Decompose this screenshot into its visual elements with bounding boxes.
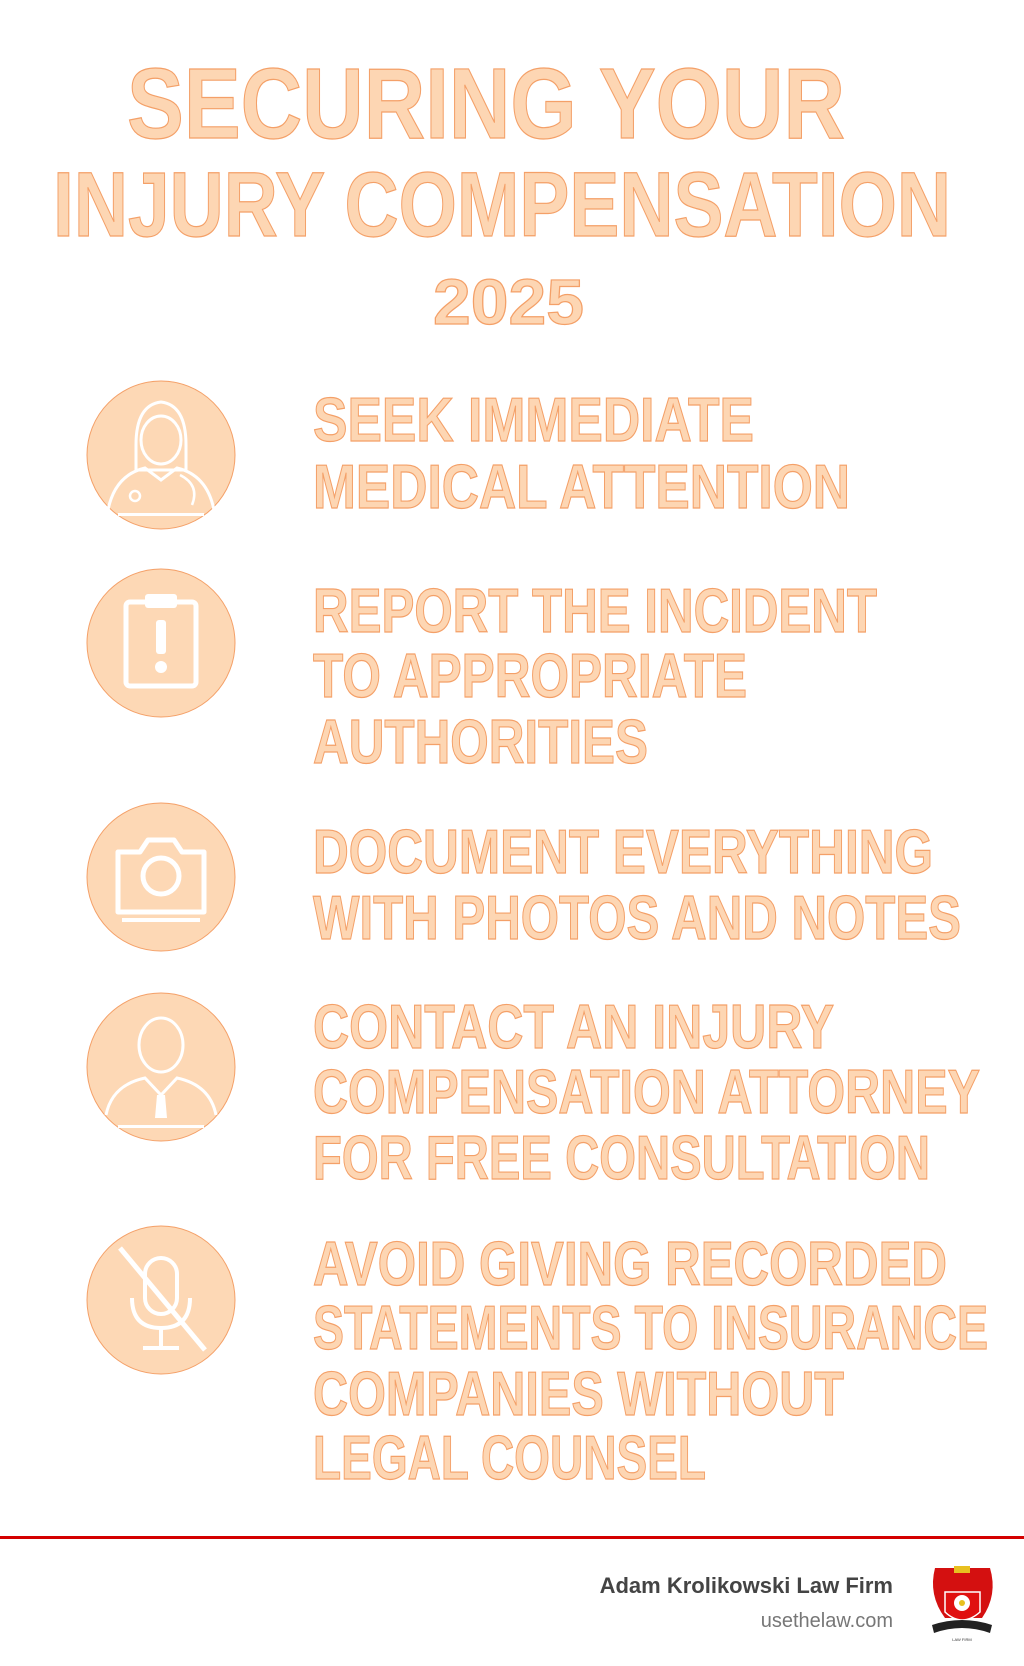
title: SECURING YOUR: [127, 48, 845, 160]
step text: COMPANIES WITHOUT: [313, 1360, 844, 1429]
step text: [313, 818, 961, 953]
step text: [313, 993, 980, 1193]
step text: REPORT THE INCIDENT: [313, 577, 877, 646]
step text: MEDICAL ATTENTION: [313, 453, 850, 522]
step 4: contact attorney: [87, 993, 980, 1193]
step text: TO APPROPRIATE: [313, 642, 747, 711]
step 1: seek medical attention: [87, 381, 850, 529]
footer: Adam Krolikowski Law Firm: [600, 1573, 893, 1598]
step 3: document everything: [87, 803, 961, 953]
title: [53, 48, 951, 338]
logo: [932, 1566, 993, 1642]
icon: muted microphone: [87, 1226, 235, 1374]
step 2: report incident: [87, 569, 877, 777]
logo: LAW FIRM: [952, 1637, 972, 1642]
step text: CONTACT AN INJURY: [313, 993, 834, 1062]
step text: SEEK IMMEDIATE: [313, 386, 754, 455]
step text: [313, 1230, 988, 1493]
step text: LEGAL COUNSEL: [313, 1424, 706, 1493]
icon: doctor: [87, 381, 235, 529]
footer: [600, 1566, 993, 1642]
step 5: avoid recorded statements: [87, 1226, 988, 1493]
title: 2025: [433, 266, 584, 338]
icon: attorney: [87, 993, 235, 1141]
icon: camera: [87, 803, 235, 951]
footer: usethelaw.com: [761, 1610, 893, 1632]
icon: clipboard: [87, 569, 235, 717]
step text: [313, 577, 877, 777]
step text: [313, 386, 850, 522]
step text: AUTHORITIES: [313, 708, 648, 777]
